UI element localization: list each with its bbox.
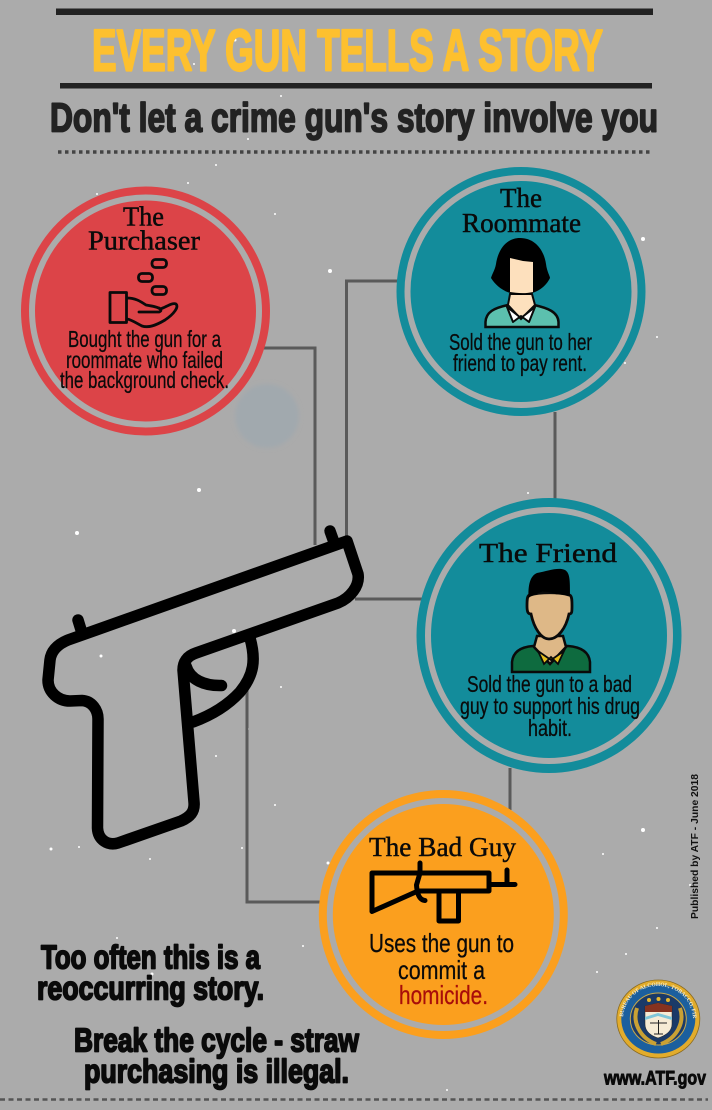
text: break the cycle: purchasing is illegal. [84,1052,349,1090]
text: friend description: habit. [528,715,572,741]
text: friend description: Sold the gun to a bad [467,671,632,697]
text: bad guy description: commit a [398,955,485,985]
text: bad guy description [369,928,514,1010]
icon: man [512,569,590,672]
text: purchaser description [60,326,229,393]
heading: the roommate: The [500,183,542,213]
text: break the cycle [74,1022,359,1090]
panel: the roommate [396,167,646,416]
icon: rifle [372,863,515,921]
text: purchaser description: the background check. [60,367,229,393]
text: bad guy description: Uses the gun to [369,928,514,958]
text: break the cycle: Break the cycle - straw [74,1022,359,1058]
text: purchaser description: Bought the gun for a [68,326,221,352]
icon: hand dropping coins [110,260,177,327]
text: reoccurring story [37,938,264,1006]
heading: the purchaser: Purchaser [88,226,200,256]
text: roommate description [449,329,592,376]
text: reoccurring story: reoccurring story. [37,970,264,1006]
heading: the purchaser: The [123,202,164,232]
text: roommate description: Sold the gun to her [449,329,592,355]
text: roommate description: friend to pay rent. [453,350,587,376]
heading: the bad guy: The Bad Guy [369,832,517,862]
text: purchaser description: roommate who failed [66,347,223,373]
connector lines [247,281,555,902]
heading: the friend: The Friend [479,538,618,568]
icon: large handgun outline [48,531,358,844]
icon: ATF seal: BUREAU OF ALCOHOL, TOBACCO, FIREARMS [619,982,696,1018]
panel: the friend [416,498,682,773]
panel: the purchaser [21,186,270,436]
text: friend description: guy to support his drug [460,693,640,719]
text: bad guy description: homicide. [399,980,488,1010]
heading: the roommate [462,183,581,238]
text: publication credit: Published by ATF - June 2018 [690,774,701,919]
text: friend description [460,671,640,741]
panel: the bad guy [319,790,568,1039]
heading: the purchaser [88,202,200,256]
heading: the roommate: Roommate [462,208,581,238]
text: reoccurring story: Too often this is a [41,938,261,976]
icon: woman [486,238,558,327]
